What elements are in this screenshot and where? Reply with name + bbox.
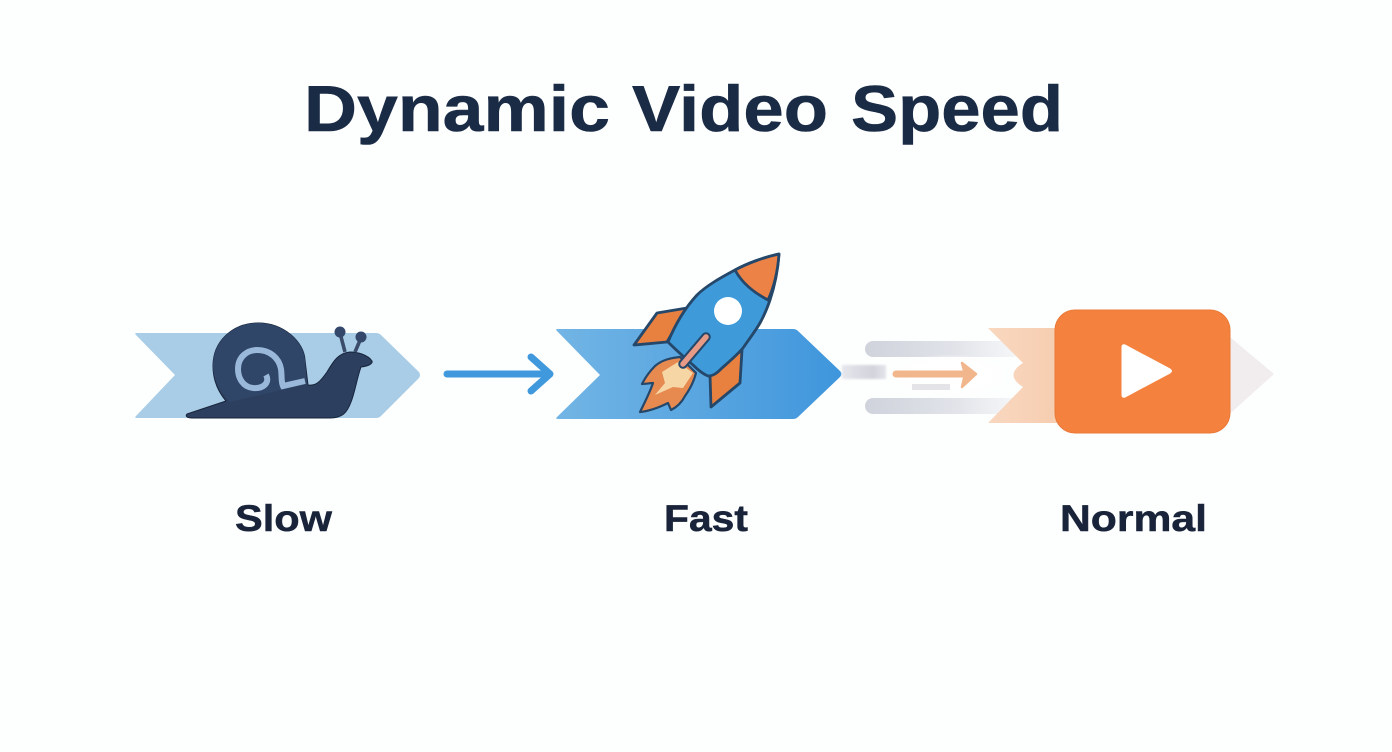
- panel: fast: [556, 254, 842, 419]
- title: Dynamic: [304, 72, 610, 145]
- label: fast: Fast: [664, 498, 748, 539]
- streak arrow: [896, 363, 976, 387]
- rocket nose: [735, 254, 779, 300]
- connector: speed streaks: [842, 341, 1020, 414]
- chevron: slow: [135, 333, 420, 418]
- label: slow: Slow: [235, 498, 332, 539]
- icon: rocket: [634, 254, 779, 412]
- rocket fins: [634, 308, 687, 345]
- rocket body: [668, 254, 779, 376]
- rocket window: [714, 297, 742, 325]
- snail spiral: [238, 350, 305, 388]
- arrow: slow to fast: [447, 357, 550, 391]
- chevron: fast: [556, 329, 842, 419]
- chevron: tip: [1225, 333, 1274, 418]
- panel: slow: [135, 323, 420, 418]
- title: Video: [632, 72, 828, 145]
- label: normal: Normal: [1060, 498, 1207, 539]
- title: Speed: [851, 72, 1063, 145]
- icon: play button: [1055, 310, 1230, 433]
- rocket exhaust tube: [683, 337, 706, 364]
- icon: snail: [186, 323, 372, 418]
- chevron: tail: [988, 328, 1060, 423]
- snail antennae: [334, 326, 366, 352]
- panel: normal: [988, 310, 1274, 433]
- rocket flame: [640, 357, 696, 412]
